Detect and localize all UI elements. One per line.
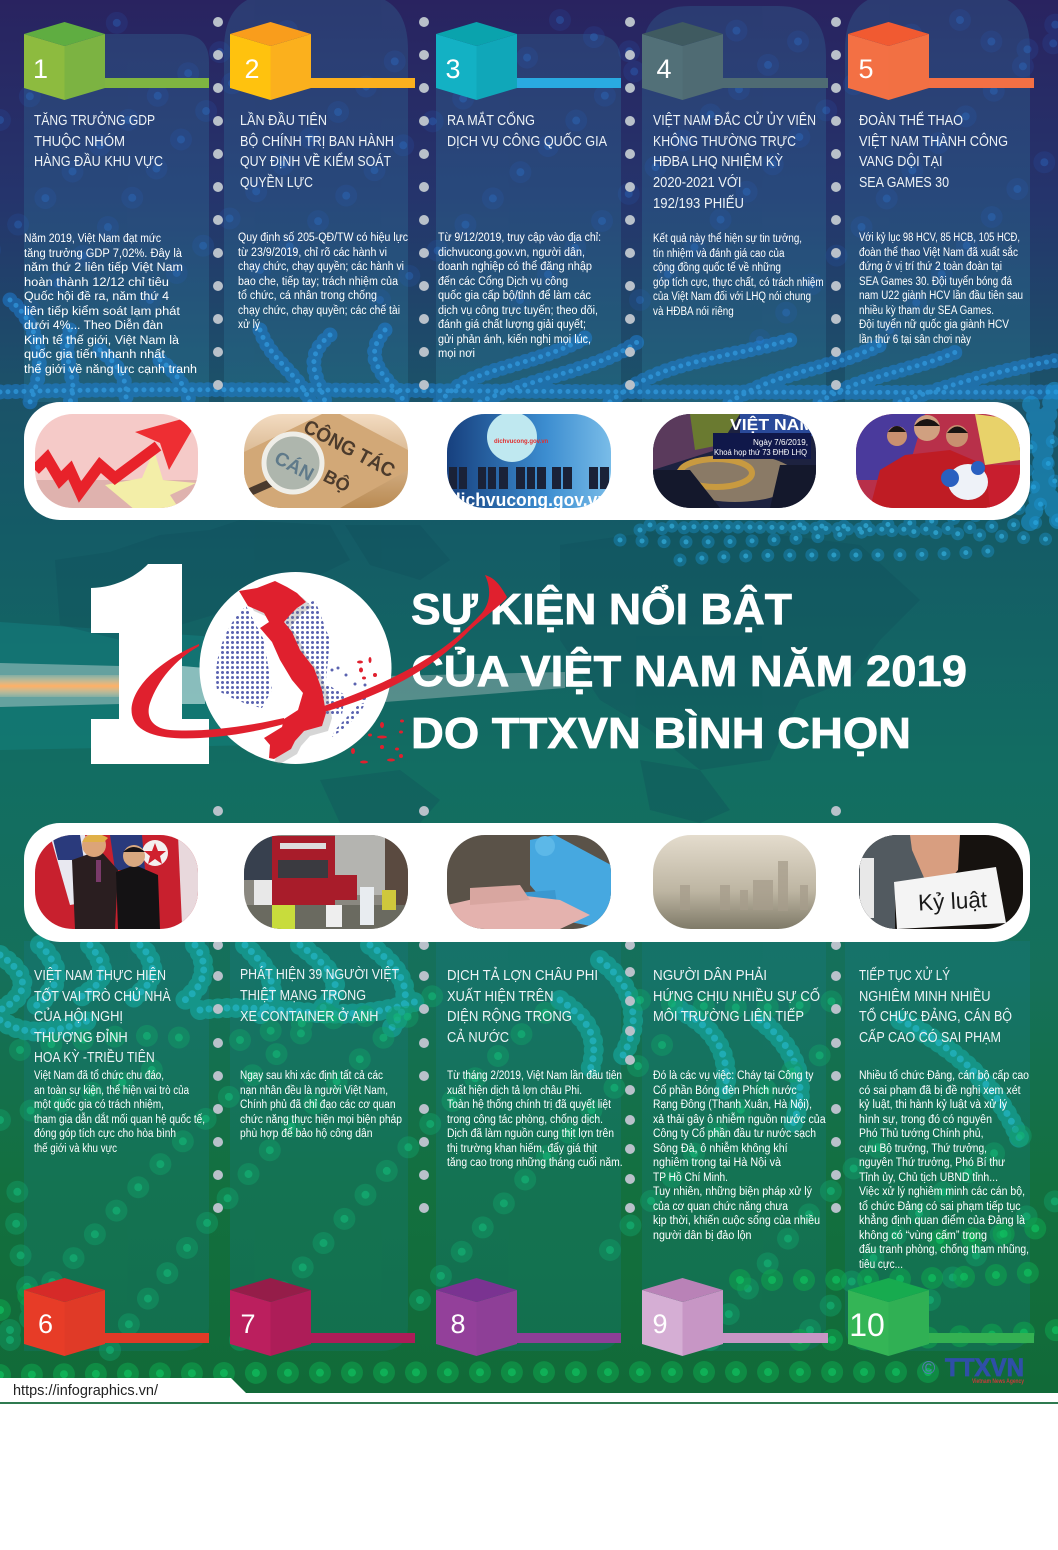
body 5: Với kỷ lục 98 HCV, 85 HCB, 105 HCĐ,: [859, 232, 1020, 244]
body 10: hình sự, trong đó có nguyên: [859, 1114, 992, 1126]
body 3: doanh nghiệp có thể đăng nhập: [438, 261, 592, 273]
body 3: [438, 232, 601, 360]
body 3: dịch vụ công trực tuyến; theo dõi,: [438, 305, 598, 317]
body 10: có sai phạm đã bị đề nghị xem xét: [859, 1085, 1021, 1097]
body 9: kịp thời, khiến cuộc sống của nhiều: [653, 1215, 820, 1227]
body 10: khẳng định quan điểm của Đảng là: [859, 1214, 1026, 1227]
body 1: hoàn thành 12/12 chỉ tiêu: [24, 277, 169, 289]
body 5: SEA Games 30. Đội tuyển bóng đá: [859, 276, 1013, 288]
red orbit swoosh: [132, 575, 507, 738]
title: CỦA VIỆT NAM NĂM 2019: [411, 645, 967, 696]
globe: [200, 572, 392, 764]
body 10: không có “vùng cấm” trong: [859, 1230, 987, 1242]
event 3: [436, 22, 621, 360]
photo 3: portal launch: dichvucong.gov.vn: [450, 490, 608, 510]
body 1: Quốc hội đề ra, năm thứ 4: [24, 291, 170, 303]
body 3: quốc gia cấp bộ/tỉnh để làm các: [438, 290, 591, 302]
body 4: góp tích cực, thực chất, có trách nhiệm: [653, 277, 824, 289]
body 9: TP Hồ Chí Minh.: [653, 1172, 728, 1184]
body 8: Toàn hệ thống chính trị đã quyết liệt: [447, 1099, 612, 1111]
heading 1: TĂNG TRƯỞNG GDP: [34, 111, 155, 129]
photo 7: container truck: [244, 835, 408, 929]
heading 2: QUYỀN LỰC: [240, 174, 313, 191]
title: SỰ KIỆN NỔI BẬT: [411, 583, 792, 634]
TTXVN logo: Vietnam News Agency: [972, 1379, 1025, 1385]
body 5: nhiều kỳ tham dự SEA Games.: [859, 305, 994, 317]
body 9: Công ty Cổ phần đầu tư nước sạch: [653, 1128, 816, 1140]
heading 2: BỘ CHÍNH TRỊ BAN HÀNH: [240, 133, 394, 150]
photo 3: portal launch: dichvucong.gov.vn: [494, 439, 549, 445]
body 5: đoàn thể thao Việt Nam đã xuất sắc: [859, 246, 1018, 259]
cube number 4: 4: [656, 54, 672, 84]
cube number 5: [848, 22, 1034, 100]
body 2: từ 23/9/2019, chỉ rõ các hành vi: [238, 247, 387, 259]
body 4: của Việt Nam đối với LHQ nói chung: [653, 291, 811, 303]
body 5: đứng ở vị trí thứ 2 toàn đoàn tại: [859, 261, 1002, 273]
event 10: [848, 966, 1034, 1356]
photo 4: UN Security Council: Khoá họp thứ 73 ĐHĐ LHQ: [714, 448, 807, 457]
body 1: năm thứ 2 liên tiếp Việt Nam: [24, 262, 183, 274]
body 5: [859, 232, 1023, 346]
heading 6: TỐT VAI TRÒ CHỦ NHÀ: [34, 987, 171, 1005]
body 6: an toàn sự kiện, thể hiện vai trò của: [34, 1085, 190, 1097]
heading 3: RA MẮT CỔNG: [447, 111, 535, 129]
body 1: dưới 4%... Theo Diễn đàn: [24, 319, 163, 332]
heading 8: CẢ NƯỚC: [447, 1029, 509, 1046]
photo 4: UN Security Council: VIỆT NAM: [730, 415, 814, 434]
heading 9: MÔI TRƯỜNG LIÊN TIẾP: [653, 1008, 804, 1025]
heading 6: HOA KỲ -TRIỀU TIÊN: [34, 1049, 155, 1066]
heading 5: [859, 111, 1008, 191]
heading 10: TIẾP TỤC XỬ LÝ: [859, 966, 950, 984]
body 4: tín nhiệm và đánh giá cao của: [653, 248, 785, 260]
body 7: phù hợp để bảo hộ công dân: [240, 1128, 372, 1140]
heading 1: THUỘC NHÓM: [34, 133, 125, 150]
heading 10: NGHIÊM MINH NHIỀU: [859, 988, 991, 1005]
heading 8: DỊCH TẢ LỢN CHÂU PHI: [447, 967, 598, 984]
body 7: Chính phủ đã chỉ đạo các cơ quan: [240, 1099, 396, 1111]
heading 1: [34, 111, 163, 170]
body 10: Phó Thủ tướng Chính phủ,: [859, 1128, 984, 1140]
heading 1: HÀNG ĐẦU KHU VỰC: [34, 153, 163, 170]
big number 10: [91, 564, 392, 764]
heading 9: HỨNG CHỊU NHIỀU SỰ CỐ: [653, 987, 820, 1005]
body 2: xử lý: [238, 319, 260, 331]
body 3: Từ 9/12/2019, truy cập vào địa chỉ:: [438, 232, 601, 244]
heading 2: [240, 112, 394, 191]
photo 3: portal launch: [447, 412, 611, 510]
body 1: Kinh tế thế giới, Việt Nam là: [24, 335, 180, 347]
body 2: Quy định số 205-QĐ/TW có hiệu lực: [238, 232, 408, 244]
body 10: Việc xử lý nghiêm minh các cán bộ,: [859, 1186, 1025, 1198]
comet light streaks: [0, 663, 565, 707]
photo 6: US-DPRK summit: [35, 833, 198, 929]
heading 5: SEA GAMES 30: [859, 174, 949, 191]
body 9: nghiêm trọng tại Hà Nội và: [653, 1157, 782, 1169]
heading 5: ĐOÀN THỂ THAO: [859, 111, 963, 129]
photo 8: pig disease workers: [447, 835, 611, 930]
body 3: đánh giá chất lượng giải quyết;: [438, 319, 586, 331]
photo 2: magnifier on paper: [244, 414, 408, 508]
body 10: kỷ luật, thi hành kỷ luật và xử lý: [859, 1099, 1007, 1111]
heading 7: [240, 966, 399, 1025]
body 6: Việt Nam đã tổ chức chu đáo,: [34, 1070, 164, 1082]
body 3: dichvucong.gov.vn, người dân,: [438, 247, 585, 259]
heading 7: THIỆT MẠNG TRONG: [240, 987, 366, 1004]
photo 9: smog city: [653, 835, 816, 929]
body 10: Tỉnh ủy, Chủ tịch UBND tỉnh...: [859, 1172, 998, 1184]
red scattered specks: [351, 657, 404, 764]
body 7: chức năng thực hiện mọi biện pháp: [240, 1114, 402, 1126]
body 10: Nhiều tổ chức Đảng, cán bộ cấp cao: [859, 1070, 1029, 1082]
body 2: bao che, tiếp tay; trách nhiệm của: [238, 276, 399, 288]
body 7: [240, 1070, 402, 1140]
column panels bottom: [24, 941, 1030, 1351]
heading 2: LẦN ĐẦU TIÊN: [240, 112, 327, 129]
body 7: nạn nhân đều là người Việt Nam,: [240, 1085, 388, 1097]
cube number 10: [848, 1278, 1034, 1356]
footer tab with URL: https://infographics.vn/: [13, 1383, 159, 1399]
photo 2: magnifier on paper: CÔNG TÁC: [300, 414, 399, 482]
photo 2: magnifier on paper: BỘ: [320, 465, 354, 496]
heading 6: THƯỢNG ĐỈNH: [34, 1029, 128, 1046]
cube number 9: 9: [652, 1309, 668, 1339]
body 7: Ngay sau khi xác định tất cả các: [240, 1070, 383, 1082]
heading 3: [447, 111, 607, 150]
cube number 1: 1: [33, 54, 48, 84]
body 8: tăng cao trong những tháng cuối năm.: [447, 1157, 623, 1169]
cube number 6: [24, 1278, 209, 1356]
body 2: chạy chức, chạy quyền; các hành vi: [238, 261, 404, 273]
body 6: [34, 1070, 205, 1155]
heading 4: 192/193 PHIẾU: [653, 195, 744, 212]
body 10: cựu Bộ trưởng, Thứ trưởng,: [859, 1143, 987, 1155]
event 7: [230, 966, 415, 1356]
Vietnam map: [239, 581, 326, 759]
white band top with photos: [24, 402, 1030, 520]
body 5: lần thứ 6 tại sân chơi này: [859, 334, 971, 346]
body 9: người dân bị đảo lộn: [653, 1230, 752, 1242]
body 5: nam U22 giành HCV lần đầu tiên sau: [859, 290, 1023, 302]
body 10: tiêu cực...: [859, 1259, 903, 1271]
body 8: [447, 1070, 623, 1169]
event 8: [436, 967, 623, 1356]
body 3: gửi phản ánh, kiến nghị mọi lúc,: [438, 334, 591, 346]
heading 3: DỊCH VỤ CÔNG QUỐC GIA: [447, 132, 607, 150]
heading 8: [447, 967, 598, 1046]
body 1: liên tiếp kiểm soát lạm phát: [24, 306, 181, 318]
body 6: thế giới và khu vực: [34, 1143, 117, 1155]
body 9: Đó là các vụ việc: Cháy tại Công ty: [653, 1070, 814, 1082]
cube number 2: [230, 22, 415, 100]
event 1: [24, 22, 209, 376]
green dotted waves bottom: [0, 945, 1058, 1375]
column separator dots bottom: [213, 806, 841, 1213]
TTXVN logo: ©: [922, 1358, 935, 1378]
photo 2: magnifier on paper: CÁN: [271, 447, 317, 486]
body 1: [24, 233, 197, 376]
digit one: [91, 564, 209, 764]
heading 8: DIỆN RỘNG TRONG: [447, 1008, 572, 1025]
body 10: đấu tranh phòng, chống tham nhũng,: [859, 1244, 1029, 1256]
cube number 4: [642, 22, 828, 100]
body 8: xuất hiện dịch tả lợn châu Phi.: [447, 1085, 582, 1097]
cube number 8: 8: [450, 1309, 466, 1339]
body 8: trong công tác phòng, chống dịch.: [447, 1114, 603, 1126]
TTXVN logo: TTXVN: [945, 1354, 1024, 1382]
heading 2: QUY ĐỊNH VỀ KIỂM SOÁT: [240, 152, 391, 170]
body 3: mọi nơi: [438, 348, 475, 360]
body 4: Kết quả này thể hiện sự tin tưởng,: [653, 233, 802, 245]
heading 9: NGƯỜI DÂN PHẢI: [653, 967, 767, 984]
world map silhouette: [55, 520, 920, 823]
body 9: Cổ phần Bóng đèn Phích nước: [653, 1085, 797, 1097]
body 8: Từ tháng 2/2019, Việt Nam lần đầu tiên: [447, 1070, 622, 1082]
event 5: [848, 22, 1034, 346]
heading 4: [653, 111, 816, 212]
body 1: Năm 2019, Việt Nam đạt mức: [24, 233, 161, 245]
body 9: của cơ quan chức năng chưa: [653, 1201, 789, 1213]
body 3: đến các Cổng Dịch vụ công: [438, 276, 568, 288]
heading 4: KHÔNG THƯỜNG TRỰC: [653, 133, 796, 150]
cube number 7: 7: [240, 1309, 256, 1339]
body 2: [238, 232, 408, 331]
TTXVN logo: [922, 1354, 1025, 1385]
body 4: và HĐBA nói riêng: [653, 306, 734, 318]
photo 10: discipline note: [859, 835, 1023, 929]
heading 10: [859, 966, 1012, 1046]
cube number 1: [24, 22, 209, 100]
footer tab with URL: [0, 1378, 1058, 1404]
heading 7: XE CONTAINER Ở ANH: [240, 1007, 378, 1025]
blue dotted waves top: [0, 10, 1058, 560]
heading 8: XUẤT HIỆN TRÊN: [447, 988, 554, 1005]
heading 6: CỦA HỘI NGHỊ: [34, 1007, 123, 1025]
cube number 10: 10: [849, 1307, 885, 1343]
column separator dots top: [213, 17, 841, 390]
cube number 8: [436, 1278, 621, 1356]
body 2: chạy chức, chạy quyền; các chế tài: [238, 305, 400, 317]
body 9: [653, 1070, 826, 1242]
title: [411, 583, 967, 758]
body 4: cộng đồng quốc tế về những: [653, 262, 781, 274]
heading 5: VIỆT NAM THÀNH CÔNG: [859, 133, 1008, 150]
cube number 5: 5: [858, 54, 874, 84]
body 5: Đội tuyển nữ quốc gia giành HCV: [859, 319, 1009, 331]
body 1: tăng trưởng GDP 7,02%. Đây là: [24, 248, 183, 260]
body 9: xả thải gây ô nhiễm nguồn nước của: [653, 1113, 826, 1126]
event 6: [24, 967, 209, 1356]
cube number 9: [642, 1278, 828, 1356]
body 1: quốc gia tiến nhanh nhất: [24, 349, 166, 361]
body 6: một quốc gia có trách nhiệm,: [34, 1099, 164, 1111]
photo 4: UN Security Council: [653, 414, 816, 508]
event 9: [642, 967, 828, 1356]
photo 1: growth arrow: [35, 414, 198, 510]
heading 6: [34, 967, 171, 1066]
cube number 2: 2: [244, 54, 260, 84]
body 2: tổ chức, cá nhân trong chống: [238, 290, 377, 302]
heading 4: VIỆT NAM ĐẮC CỬ ỦY VIÊN: [653, 111, 816, 129]
event 4: [642, 22, 828, 318]
heading 5: VANG DỘI TẠI: [859, 153, 942, 170]
body 9: Tuy nhiên, những biện pháp xử lý: [653, 1186, 812, 1198]
body 9: Rạng Đông (Thanh Xuân, Hà Nội),: [653, 1099, 812, 1111]
body 8: thị trường khan hiếm, đẩy giá thịt: [447, 1143, 598, 1155]
cube number 3: 3: [445, 54, 461, 84]
body 9: Sông Đà, ô nhiễm không khí: [653, 1142, 788, 1155]
cube number 6: 6: [38, 1309, 53, 1339]
body 10: nguyên Thứ trưởng, Phó Bí thư: [859, 1157, 1005, 1169]
heading 10: CẤP CAO CÓ SAI PHẠM: [859, 1029, 1001, 1046]
photo 10: discipline note: Kỷ luật: [917, 886, 988, 916]
heading 6: VIỆT NAM THỰC HIỆN: [34, 967, 166, 984]
body 6: đóng góp tích cực cho hòa bình: [34, 1128, 176, 1140]
event 2: [230, 22, 415, 331]
column panels top: [24, 0, 1030, 402]
body 10: tổ chức Đảng có sai phạm tiếp tục: [859, 1201, 1021, 1213]
title: DO TTXVN BÌNH CHỌN: [411, 708, 911, 758]
body 1: thế giới về năng lực cạnh tranh: [24, 364, 197, 376]
heading 7: PHÁT HIỆN 39 NGƯỜI VIỆT: [240, 966, 399, 983]
heading 9: [653, 967, 820, 1025]
white band bottom with photos: [24, 823, 1030, 942]
body 8: Dịch đã làm nguồn cung thịt lợn trên: [447, 1128, 614, 1140]
photo 5: SEA Games athletes: [856, 414, 1020, 508]
body 6: tham gia dẫn dắt mối quan hệ quốc tế,: [34, 1113, 205, 1126]
body 10: [859, 1070, 1029, 1271]
heading 10: TỔ CHỨC ĐẢNG, CÁN BỘ: [859, 1007, 1012, 1025]
cube number 7: [230, 1278, 415, 1356]
body 4: [653, 233, 824, 318]
cube number 3: [436, 22, 621, 100]
photo 4: UN Security Council: Ngày 7/6/2019,: [753, 438, 808, 447]
heading 4: 2020-2021 VỚI: [653, 174, 742, 191]
heading 4: HĐBA LHQ NHIỆM KỲ: [653, 153, 783, 170]
